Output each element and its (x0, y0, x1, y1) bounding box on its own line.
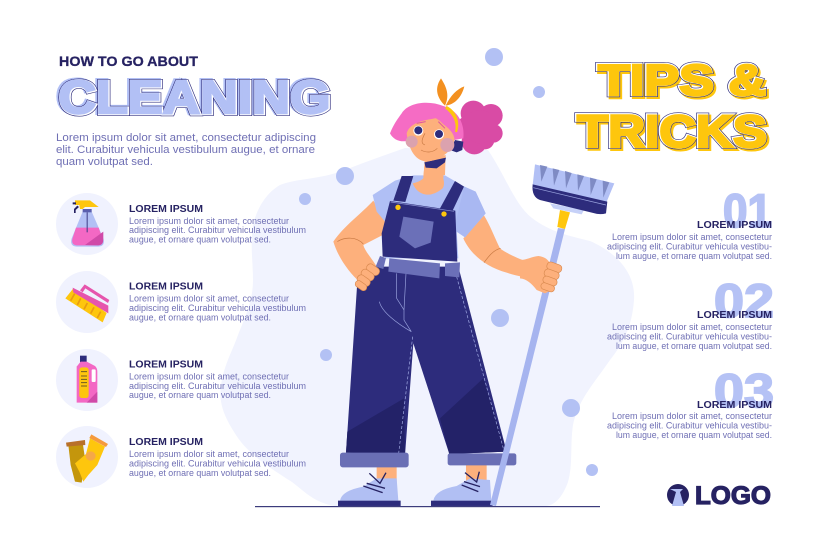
item 4 text (129, 436, 306, 478)
tip 02 (607, 274, 774, 351)
background blob (220, 148, 634, 506)
title: cleaning: CLEANING (59, 72, 331, 124)
ground line (255, 506, 600, 507)
item 4 text: augue, et ornare quam volutpat sed. (129, 468, 271, 478)
item 2 text: augue, et ornare quam volutpat sed. (129, 312, 271, 322)
item 1 text: adipiscing elit. Curabitur vehicula vestibulum (129, 225, 306, 235)
item 3 text: LOREM IPSUM (129, 358, 203, 370)
tip 02: Lorem ipsum dolor sit amet, consectetur (612, 322, 772, 332)
item 4 text: LOREM IPSUM (129, 436, 203, 448)
heading: tips and tricks: TRICKS (577, 106, 767, 157)
right hand gripping broom (520, 256, 563, 293)
broom (490, 164, 614, 506)
item 1 text: LOREM IPSUM (129, 203, 203, 215)
heading: tips and tricks: TRICKS (578, 108, 768, 158)
soap bubbles (299, 48, 598, 476)
tip 01: 01 (723, 184, 772, 237)
shirt (373, 175, 486, 258)
tip 03: 03 (714, 364, 774, 417)
item 2 text: LOREM IPSUM (129, 280, 203, 292)
icon: rubber gloves (66, 434, 108, 483)
item 1 text: augue, et ornare quam volutpat sed. (129, 234, 271, 244)
headband (445, 106, 458, 132)
item 3 text: augue, et ornare quam volutpat sed. (129, 390, 271, 400)
tip 02: 02 (714, 274, 774, 327)
intro paragraph: quam volutpat sed. (56, 156, 153, 168)
intro paragraph (56, 132, 316, 168)
item 3 text: adipiscing elit. Curabitur vehicula vestibulum (129, 381, 306, 391)
left arm (333, 201, 385, 282)
tip 03: lum augue, et ornare quam volutpat sed. (616, 430, 772, 440)
tip 03: LOREM IPSUM (697, 399, 772, 411)
tip 01 (607, 184, 772, 261)
icon: spray bottle (71, 200, 104, 247)
item 3 text (129, 358, 306, 400)
item 1: spray bottle (56, 193, 118, 255)
neck (423, 155, 446, 177)
item 2 text: adipiscing elit. Curabitur vehicula vestibulum (129, 303, 306, 313)
tip 03: Lorem ipsum dolor sit amet, consectetur (612, 411, 772, 421)
head (390, 78, 503, 177)
heading: tips and tricks: TIPS & (598, 56, 766, 105)
face (407, 118, 454, 161)
item 4: rubber gloves (56, 426, 118, 488)
tip 01: lum augue, et ornare quam volutpat sed. (616, 251, 772, 261)
icon: scrub brush (65, 284, 109, 322)
heading: tips and tricks: TIPS & (600, 58, 768, 106)
left hand fingers (354, 262, 381, 292)
tip 02: LOREM IPSUM (697, 309, 772, 321)
choker (424, 158, 446, 168)
subtitle: how to go about: HOW TO GO ABOUT (59, 53, 198, 69)
tip 02: lum augue, et ornare quam volutpat sed. (616, 341, 772, 351)
broom head (532, 164, 614, 229)
heading: tips and tricks: TRICKS (576, 106, 766, 156)
ear (450, 140, 463, 152)
title: cleaning: CLEANING (59, 72, 331, 124)
item 2 text (129, 280, 306, 322)
tip 01: adipiscing elit. Curabitur vehicula vestibu- (607, 242, 772, 252)
tip 01: LOREM IPSUM (697, 219, 772, 231)
legs and trousers (338, 267, 516, 506)
right arm (463, 215, 543, 280)
character: lady with overalls (333, 78, 543, 506)
item 3: detergent bottle (56, 349, 118, 411)
item 4 text: adipiscing elit. Curabitur vehicula vestibulum (129, 458, 306, 468)
item 2 text: Lorem ipsum dolor sit amet, consectetur (129, 294, 289, 304)
tip 03: adipiscing elit. Curabitur vehicula vestibu- (607, 420, 772, 430)
item 1 text (129, 203, 306, 244)
tip 01: Lorem ipsum dolor sit amet, consectetur (612, 232, 772, 242)
item 3 text: Lorem ipsum dolor sit amet, consectetur (129, 372, 289, 382)
hair bow (437, 78, 464, 106)
ponytail (457, 101, 503, 154)
belt (376, 256, 460, 278)
tip 02: adipiscing elit. Curabitur vehicula vestibu- (607, 332, 772, 342)
logo: LOGO (695, 482, 771, 510)
overall straps and bib (382, 176, 464, 262)
broom stick (490, 228, 565, 506)
heading: tips and tricks: TIPS & (598, 56, 766, 104)
tip 03 (607, 364, 774, 440)
item 1 text: Lorem ipsum dolor sit amet, consectetur (129, 216, 289, 226)
pocket (399, 217, 434, 248)
shoes (338, 472, 493, 506)
title: cleaning: CLEANING (58, 71, 330, 123)
torso (333, 157, 543, 282)
neck (413, 157, 445, 195)
item 4 text: Lorem ipsum dolor sit amet, consectetur (129, 449, 289, 459)
hair (390, 103, 464, 141)
heading: tips and tricks: TIPS & (598, 56, 766, 104)
heading: tips and tricks: TRICKS (576, 106, 766, 156)
intro paragraph: elit. Curabitur vehicula vestibulum augue, et ornare (56, 144, 315, 156)
heading: tips and tricks (576, 56, 768, 158)
title: cleaning: CLEANING (57, 70, 329, 122)
intro paragraph: Lorem ipsum dolor sit amet, consectetur adipiscing (56, 132, 316, 144)
icon: detergent bottle (77, 356, 97, 403)
item 2: scrub brush (56, 271, 118, 333)
